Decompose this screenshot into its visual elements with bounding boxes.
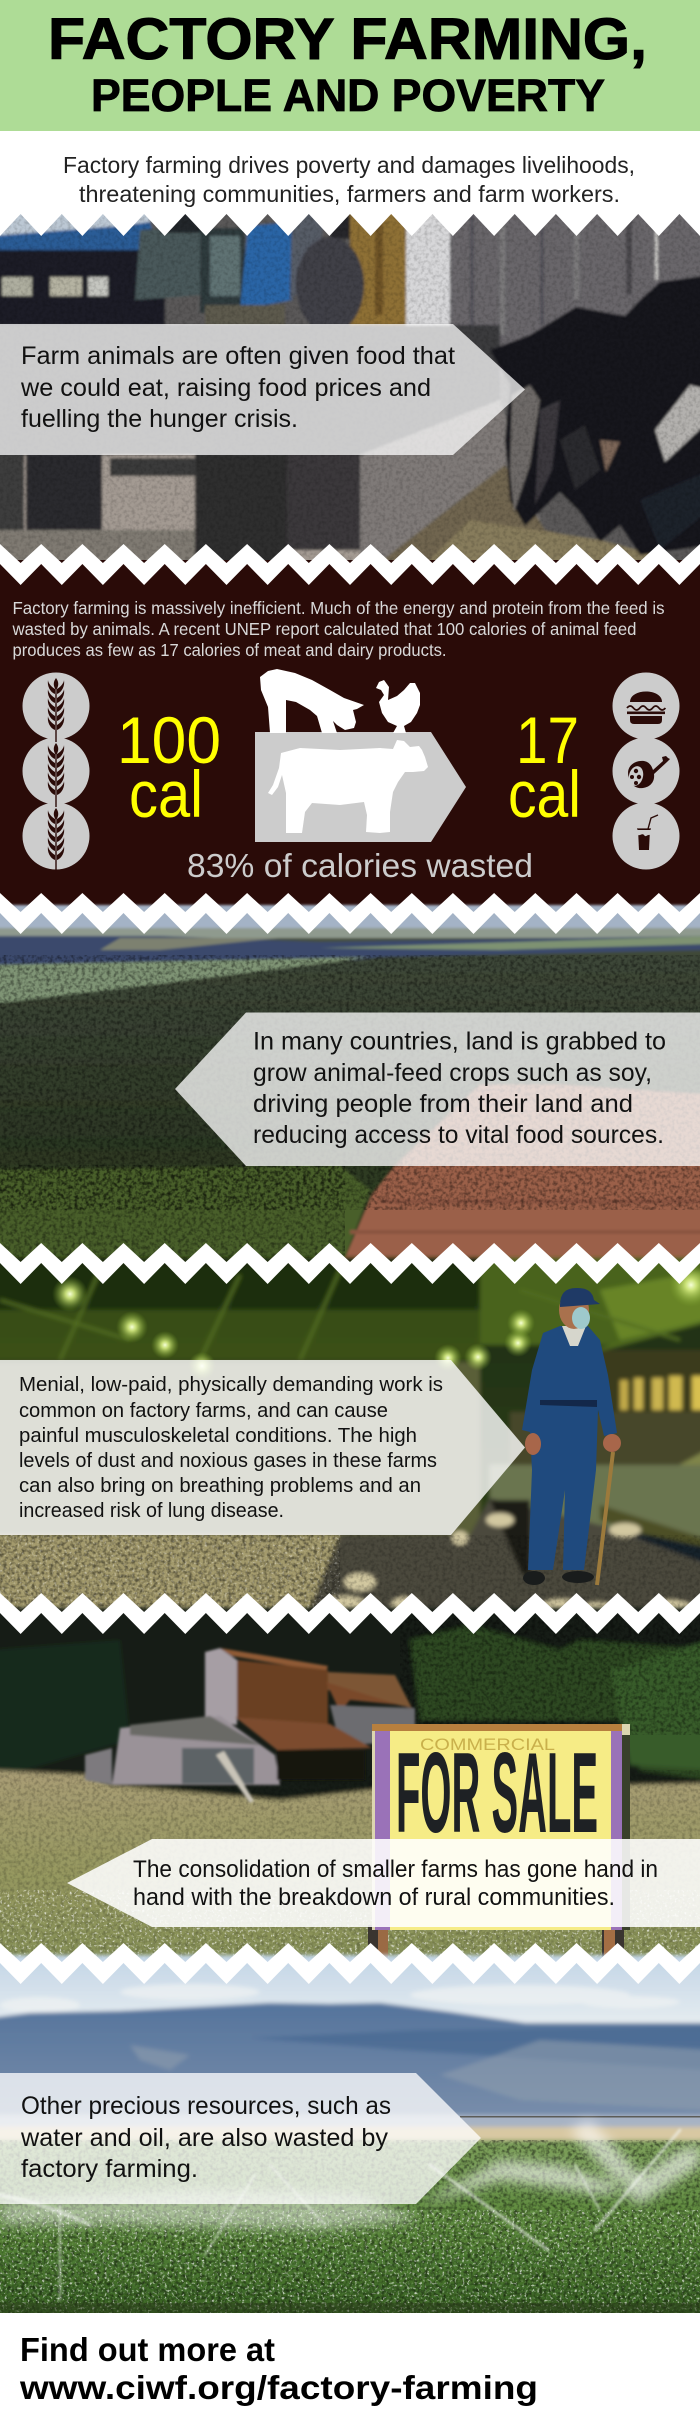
callout: food prices: fuelling the hunger crisis. <box>21 405 298 433</box>
callout: land grabbing: In many countries, land is grabbed to <box>253 1028 666 1056</box>
footer: find out more: www.ciwf.org/factory-farming <box>19 2369 538 2406</box>
icons: wheat column <box>22 672 90 872</box>
callout: food prices: Farm animals are often given food that <box>21 342 455 370</box>
callout: worker health: increased risk of lung disease. <box>19 1499 284 1522</box>
stat: 100 cal: cal <box>129 757 203 831</box>
stat: 17 cal: cal <box>508 757 581 831</box>
icon: burger <box>627 692 665 724</box>
footer: find out more: Find out more at <box>20 2331 275 2368</box>
intro text: threatening communities, farmers and farm workers. <box>79 181 620 207</box>
inefficiency text: wasted by animals. A recent UNEP report calculated that 100 calories of animal feed <box>12 619 637 639</box>
callout: worker health: levels of dust and noxious gases in these farms <box>19 1449 437 1472</box>
icons: food column <box>612 672 680 870</box>
stat: 100 cal <box>117 703 221 831</box>
barn <box>85 1648 415 1803</box>
icon: ham <box>627 756 670 788</box>
stat: 17 cal <box>508 703 581 831</box>
photo: tractor and cows <box>0 205 700 570</box>
icon: pig <box>260 669 364 733</box>
callout: food prices: we could eat, raising food prices and <box>20 374 431 402</box>
callout: land grabbing: grow animal-feed crops such as soy, <box>253 1059 652 1087</box>
icon: chicken <box>376 680 420 733</box>
callout: resources wasted: water and oil, are also wasted by <box>20 2124 388 2152</box>
stat: 17 cal: 17 <box>516 703 579 777</box>
photo: worker in broiler shed <box>0 1258 700 1620</box>
callout: rural communities <box>67 1839 700 1927</box>
intro text <box>0 131 700 236</box>
water sprays <box>0 2130 680 2300</box>
callout: rural communities: hand with the breakdown of rural communities. <box>133 1884 615 1911</box>
header band <box>0 0 700 131</box>
footer: find out more <box>0 2313 700 2417</box>
caption: calories wasted: 83% of calories wasted <box>187 847 533 884</box>
callout: resources wasted <box>0 2073 481 2204</box>
inefficiency text <box>12 598 665 660</box>
intro text: Factory farming drives poverty and damages livelihoods, <box>63 152 635 178</box>
for sale sign <box>368 1724 630 1959</box>
callout: land grabbing <box>175 1012 700 1166</box>
callout: resources wasted: Other precious resources, such as <box>21 2092 391 2120</box>
arrow: conversion with cow <box>255 732 466 842</box>
callout: rural communities: The consolidation of smaller farms has gone hand in <box>133 1856 658 1883</box>
title line 2: PEOPLE AND POVERTY <box>91 70 605 121</box>
callout: worker health: Menial, low-paid, physically demanding work is <box>19 1373 443 1396</box>
inefficiency text: produces as few as 17 calories of meat and dairy products. <box>12 640 446 660</box>
photo: abandoned farm for sale <box>0 1608 700 1968</box>
photo: deforested land <box>0 905 700 1270</box>
callout: worker health: can also bring on breathing problems and an <box>19 1474 421 1497</box>
callout: worker health <box>0 1360 525 1535</box>
stat: 100 cal: 100 <box>117 703 221 777</box>
icon: drink <box>637 815 658 850</box>
worker figure <box>522 1288 621 1585</box>
inefficiency text: Factory farming is massively inefficient. Much of the energy and protein from the feed is <box>12 598 665 618</box>
callout: food prices <box>0 324 525 455</box>
for sale sign: COMMERCIAL <box>420 1735 555 1754</box>
photo: irrigated crops and mountains <box>0 1955 700 2320</box>
callout: worker health: painful musculoskeletal conditions. The high <box>19 1424 417 1447</box>
callout: land grabbing: reducing access to vital food sources. <box>253 1121 664 1149</box>
callout: worker health: common on factory farms, and can cause <box>19 1399 388 1422</box>
icon: cow <box>268 740 428 833</box>
title line 1: FACTORY FARMING, <box>48 7 647 72</box>
panel: calorie inefficiency <box>0 560 700 916</box>
callout: resources wasted: factory farming. <box>21 2155 198 2183</box>
callout: land grabbing: driving people from their land and <box>253 1090 633 1118</box>
